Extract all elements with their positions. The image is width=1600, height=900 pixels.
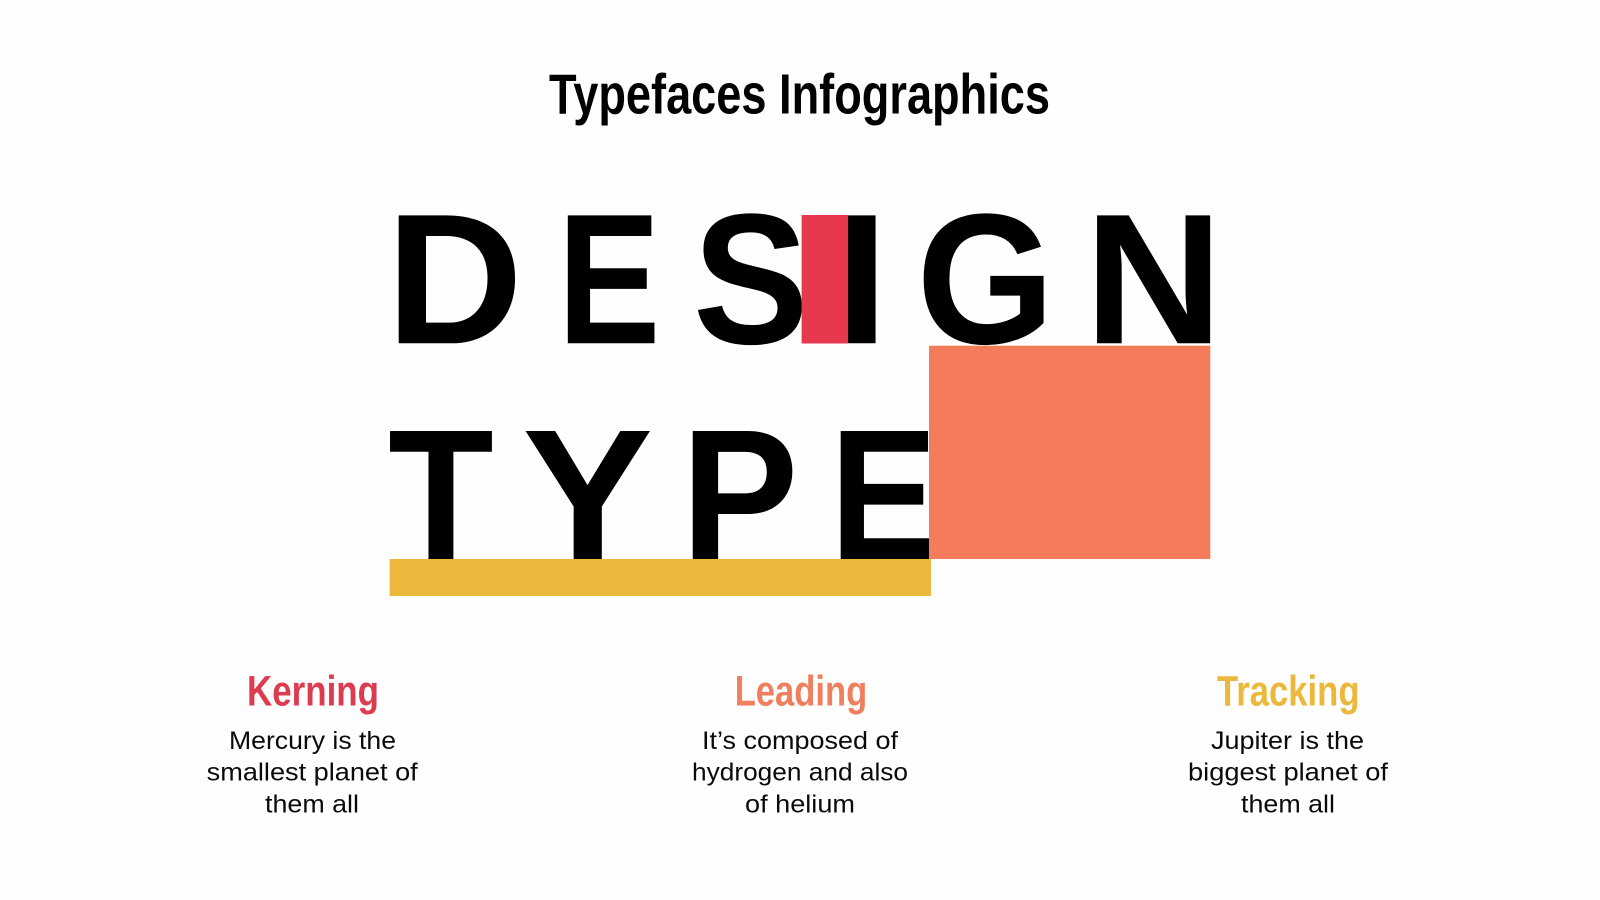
word: TYPE: T — [388, 391, 494, 599]
typographic diagram: DESIGN TYPE — [386, 175, 1223, 599]
word: DESIGN: D — [386, 175, 523, 383]
text: Leading description: of helium — [745, 791, 855, 819]
word: DESIGN: E — [558, 176, 660, 384]
leading highlight: yellow bar — [390, 559, 931, 596]
word: DESIGN: I — [835, 175, 888, 383]
word: DESIGN: G — [916, 175, 1055, 383]
text: Kerning description: them all — [265, 791, 359, 819]
text: Kerning description: Mercury is the — [229, 727, 396, 755]
word: DESIGN: S — [693, 176, 809, 384]
kerning highlight: red bar — [802, 215, 848, 344]
column: Leading — [692, 668, 908, 819]
text: Kerning description: smallest planet of — [207, 759, 418, 787]
column: Tracking — [1188, 668, 1388, 819]
heading: Tracking: Tracking — [1217, 668, 1360, 716]
word: TYPE: Y — [522, 391, 653, 599]
text: Tracking description: biggest planet of — [1188, 759, 1388, 787]
tracking highlight: orange square — [929, 346, 1210, 559]
column: Kerning — [207, 668, 418, 819]
title: Typefaces Infographics — [549, 62, 1050, 126]
text: Leading description — [692, 727, 908, 819]
heading: Kerning: Kerning — [247, 668, 379, 716]
text: Kerning description — [207, 727, 418, 819]
word: TYPE: P — [681, 392, 798, 599]
text: Tracking description — [1188, 727, 1388, 819]
text: Tracking description: them all — [1241, 791, 1335, 819]
text: Tracking description: Jupiter is the — [1211, 727, 1364, 755]
text: Leading description: hydrogen and also — [692, 759, 908, 787]
word: DESIGN — [386, 175, 1223, 384]
word: DESIGN: N — [1084, 176, 1223, 384]
word: TYPE: E — [830, 390, 938, 599]
heading: Leading: Leading — [735, 668, 867, 716]
word: TYPE — [388, 390, 938, 599]
text: Leading description: It’s composed of — [702, 727, 898, 755]
